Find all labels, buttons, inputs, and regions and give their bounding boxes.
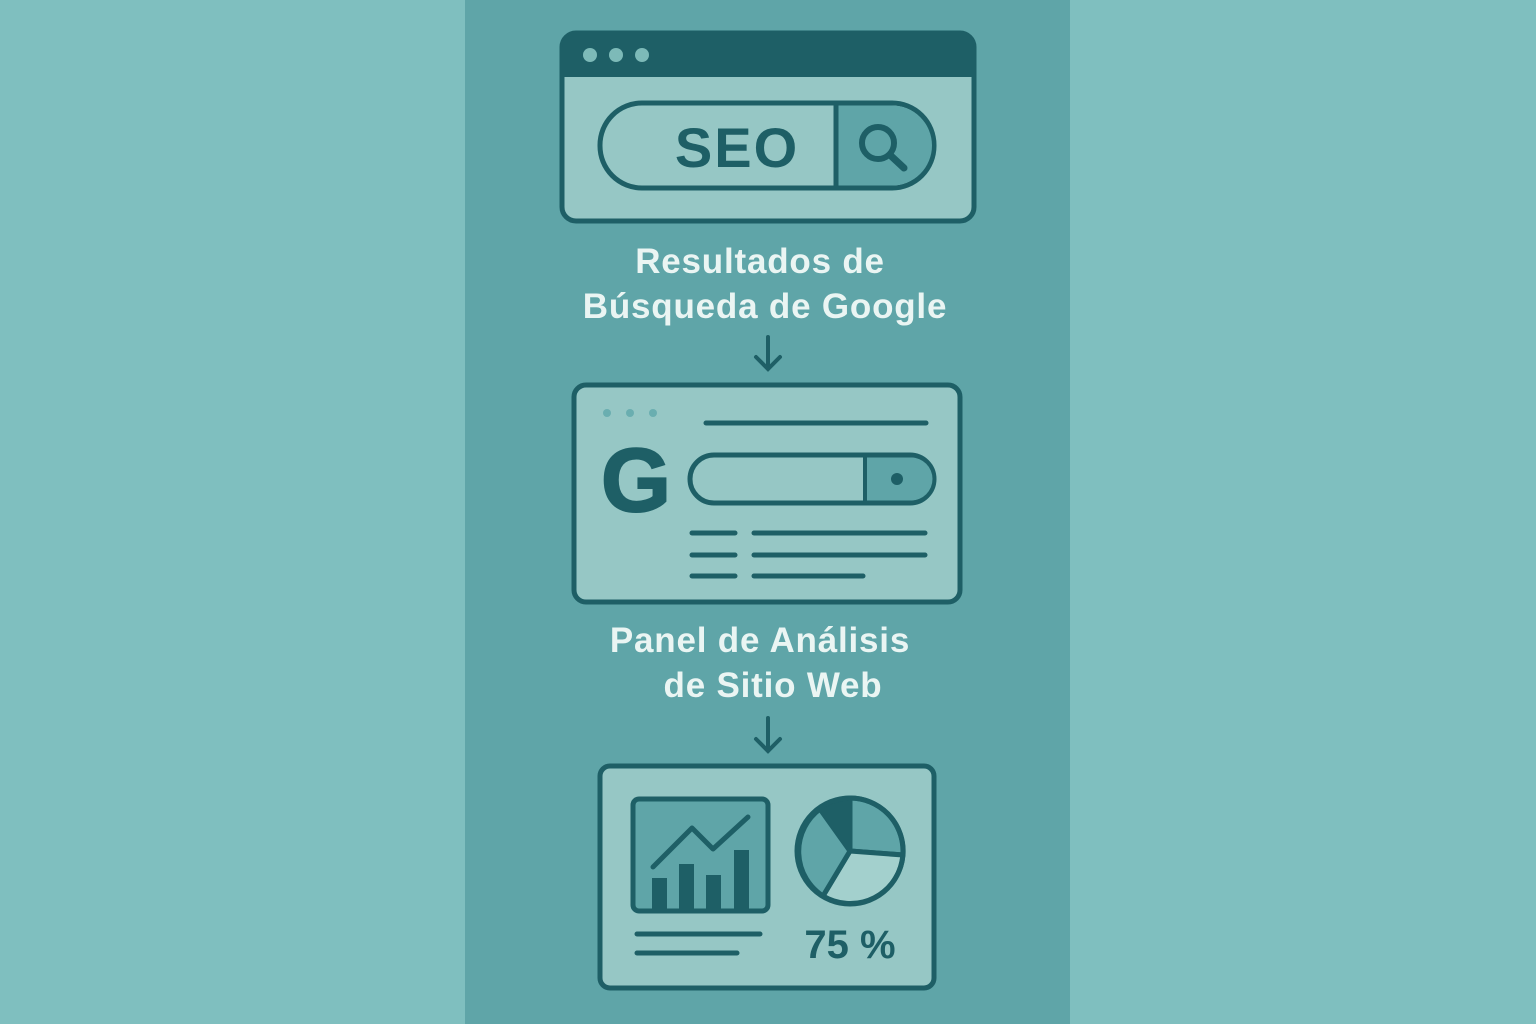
browser: Google results: G <box>601 431 671 531</box>
chart: pie <box>797 798 903 904</box>
arrow 2 <box>756 718 780 751</box>
browser: SEO search: SEO <box>675 116 799 179</box>
dashboard panel <box>600 766 934 988</box>
chart: bar + line <box>633 799 768 911</box>
label: Panel de Análisis de Sitio Web: Panel de Análisis <box>610 621 910 660</box>
label: Resultados de Búsqueda de Google <box>583 242 947 326</box>
label: Panel de Análisis de Sitio Web <box>610 621 910 705</box>
label: Resultados de Búsqueda de Google: Resultados de <box>635 242 885 281</box>
arrow 1 <box>756 337 780 369</box>
label: Resultados de Búsqueda de Google: Búsqueda de Google <box>583 287 947 326</box>
browser: SEO search <box>562 33 974 221</box>
browser: Google results <box>574 385 960 602</box>
label: Panel de Análisis de Sitio Web: de Sitio Web <box>664 666 882 705</box>
dashboard panel: 75 % <box>804 923 896 967</box>
